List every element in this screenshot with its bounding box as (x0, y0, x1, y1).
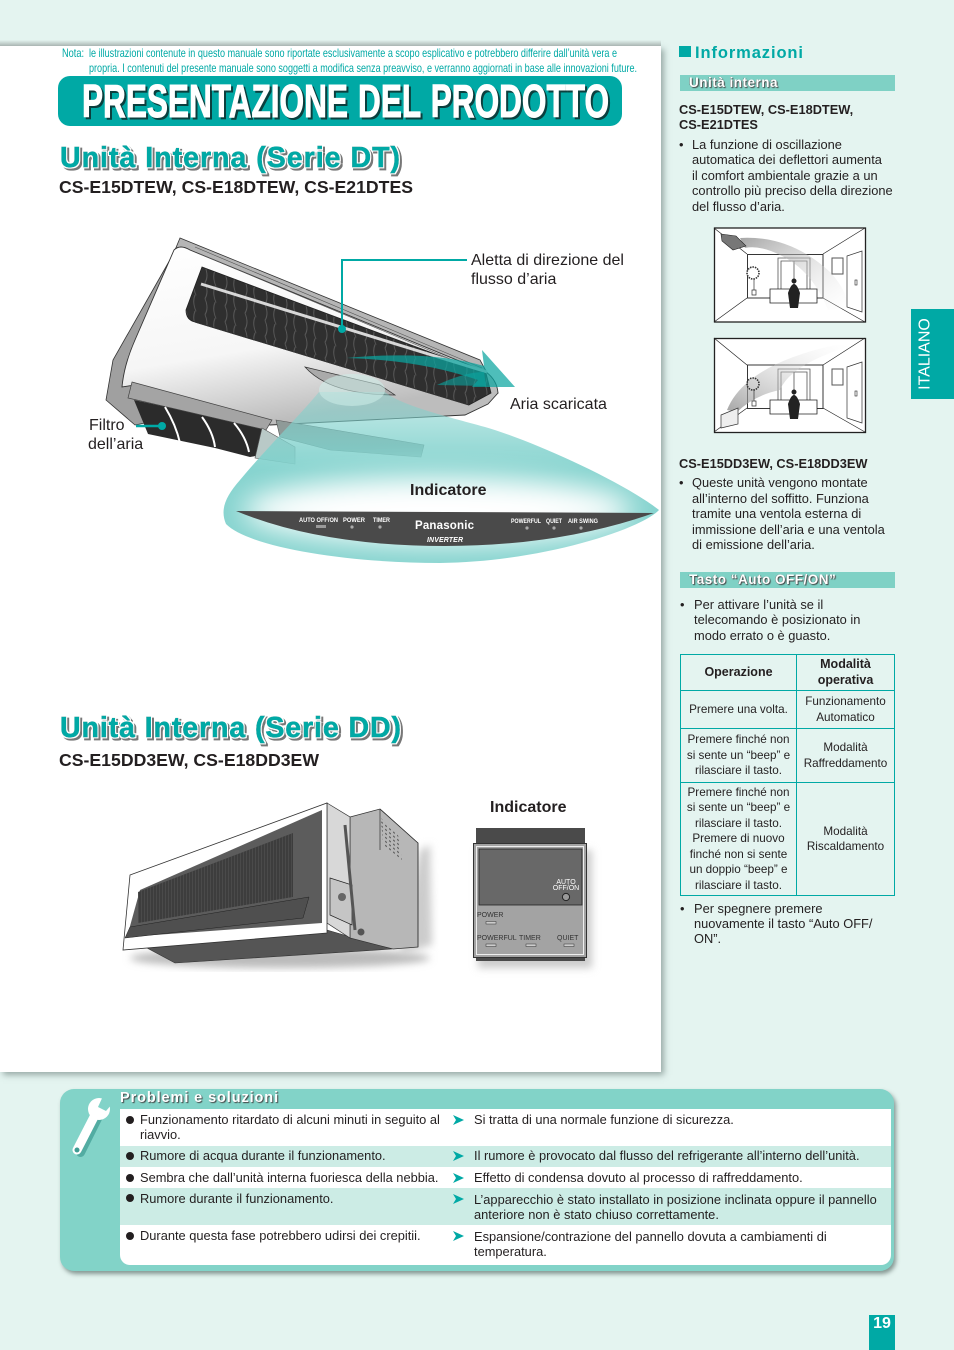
operation table: Premere una volta. (689, 703, 788, 716)
solutions column (453, 1112, 877, 1259)
controller bulge (305, 367, 395, 395)
text: DT info: CS-E15DTEW, CS-E18DTEW, (679, 102, 853, 117)
bar: unità interna (680, 75, 895, 91)
problems column: Rumore di acqua durante il funzionamento. (140, 1148, 386, 1163)
problems column: Rumore durante il funzionamento. (140, 1191, 333, 1206)
indicator strip: Panasonic (415, 520, 475, 532)
row 2 band (120, 1146, 891, 1167)
top shadow strip (0, 40, 661, 46)
text: tasto outro: • (680, 901, 684, 916)
room diagram 1 (714, 228, 866, 322)
discharge arrow (347, 350, 515, 387)
callout: aletta (338, 252, 624, 333)
text: tasto intro (680, 597, 860, 643)
vent (186, 267, 491, 405)
label: indicatore DD: Indicatore (490, 799, 567, 816)
problems column: Funzionamento ritardato di alcuni minuti in seguito al (140, 1112, 440, 1127)
panel title: Problemi e soluzioni (120, 1090, 279, 1106)
solutions column: temperatura. (474, 1244, 547, 1259)
operation table: Funzionamento Automatico (805, 695, 886, 724)
indicator panel DD: AUTO (556, 879, 576, 886)
indicator strip: AIR SWING (568, 518, 598, 525)
note text: Nota: (62, 46, 84, 60)
text: DD info: di emissione dell’aria. (692, 537, 815, 552)
indicator panel DD: POWERFUL (477, 935, 517, 942)
problems column: Sembra che dall’unità interna fuoriesca della nebbia. (140, 1170, 438, 1185)
indicator strip: POWERFUL (511, 518, 541, 525)
indicator strip: QUIET (546, 518, 562, 525)
indicator strip: POWER (343, 517, 365, 524)
problems column (126, 1112, 440, 1243)
white troubleshooting list (120, 1109, 891, 1265)
indicator strip: AUTO OFF/ON (299, 517, 338, 524)
bar: unità interna: Unità interna (689, 75, 778, 90)
text: DT info: controllo più preciso della direzione (692, 183, 893, 198)
solutions column: Il rumore è provocato dal flusso del refrigerante all’interno dell’unità. (474, 1148, 860, 1163)
page number: 19 (873, 1315, 891, 1332)
text: tasto intro: • (680, 597, 684, 612)
tab: italiano: ITALIANO (916, 318, 934, 390)
text: DD info: • (679, 475, 684, 490)
heading: serie DT: Unità Interna (Serie DT) (60, 142, 400, 174)
callout: filtro: dell’aria (88, 436, 143, 453)
callout: filtro (88, 417, 166, 453)
solutions column: Si tratta di una normale funzione di sicurezza. (474, 1112, 734, 1127)
operation table: Modalità operativa (818, 657, 873, 686)
heading: serie DD: Unità Interna (Serie DD) (60, 712, 401, 744)
operation table: Premere finché non si sente un “beep” e rilasciare il tasto. Premere di nuovo finché non si sente un doppio “beep” e rilasciare il tasto. (687, 786, 790, 892)
heading: informazioni: Informazioni (695, 44, 804, 62)
wall unit illustration (106, 238, 659, 563)
text: DT info: automatica dei deflettori aumenta (692, 152, 882, 167)
title banner: PRESENTAZIONE DEL PRODOTTO (82, 75, 609, 127)
note text: propria. I contenuti del presente manuale sono soggetti a modifica senza preavviso, e verranno aggiornati in base alle innovazioni future. (89, 61, 637, 75)
white body (122, 247, 498, 425)
text: DT info: il comfort ambientale grazie a un (692, 168, 878, 183)
solutions column: L’apparecchio è stato installato in posizione inclinata oppure il pannello (474, 1192, 877, 1207)
page number (869, 1315, 895, 1350)
text: DD info: immissione dell’aria e una ventola (692, 522, 885, 537)
problems column: Durante questa fase potrebbero udirsi dei crepitii. (140, 1228, 421, 1243)
indicator strip: INVERTER (427, 537, 463, 544)
text: tasto intro: Per attivare l’unità se il (694, 597, 823, 612)
problems column: riavvio. (140, 1127, 181, 1142)
indicator panel DD (474, 828, 592, 968)
title banner (58, 75, 622, 127)
indicator panel DD: POWER (477, 912, 503, 919)
operation table (680, 654, 895, 896)
indicator panel DD: OFF/ON (553, 885, 579, 892)
text: DD info (679, 456, 885, 552)
tab: italiano (911, 309, 954, 399)
text: DT info: CS-E21DTES (679, 117, 758, 132)
text: DT info (679, 102, 893, 214)
text: DT info: del flusso d’aria. (692, 199, 785, 214)
text: DT info: • (679, 137, 684, 152)
text: DT info: La funzione di oscillazione (692, 137, 842, 152)
text: tasto outro: nuovamente il tasto “Auto OFF/ (694, 916, 872, 931)
indicator beam (224, 392, 659, 563)
bar: tasto auto: Tasto “Auto OFF/ON” (689, 572, 836, 587)
model list DT: CS-E15DTEW, CS-E18DTEW, CS-E21DTES (59, 177, 413, 197)
note text: le illustrazioni contenute in questo manuale sono riportate esclusivamente a scopo esplicativo e potrebbero differire dall’unità vera e (89, 46, 617, 60)
indicator strip: TIMER (373, 517, 390, 524)
model list DD: CS-E15DD3EW, CS-E18DD3EW (59, 750, 320, 770)
duct unit illustration (123, 803, 432, 968)
panel: white main page (0, 46, 661, 1072)
indicator panel DD: TIMER (519, 935, 541, 942)
callout: aletta: flusso d’aria (471, 271, 556, 288)
solutions column: anteriore non è stato chiuso correttamente. (474, 1207, 719, 1222)
operation table: Modalità Raffreddamento (804, 741, 887, 770)
callout: aria scaricata: Aria scaricata (510, 396, 607, 413)
text: DD info: CS-E15DD3EW, CS-E18DD3EW (679, 456, 867, 471)
room diagram 2 (714, 338, 866, 432)
note text (62, 46, 637, 75)
text: tasto intro: telecomando è posizionato in (694, 612, 860, 627)
solutions column: Effetto di condensa dovuto al processo di raffreddamento. (474, 1170, 803, 1185)
grille and filter (134, 400, 278, 457)
text: tasto outro (680, 901, 872, 946)
callout: filtro: Filtro (89, 417, 125, 434)
text: DD info: all’interno del soffitto. Funziona (692, 491, 869, 506)
text: DD info: Queste unità vengono montate (692, 475, 868, 490)
operation table: Operazione (704, 665, 773, 679)
label: indicatore: Indicatore (410, 482, 487, 499)
indicator strip (236, 511, 654, 546)
row 4 band (120, 1188, 891, 1225)
text: tasto outro: ON”. (694, 931, 721, 946)
operation table: Modalità Riscaldamento (807, 825, 884, 853)
panel: problemi e soluzioni (60, 1089, 894, 1271)
text: DD info: tramite una ventola esterna di (692, 506, 861, 521)
gray back housing (170, 238, 498, 395)
text: tasto outro: Per spegnere premere (694, 901, 823, 916)
operation table: Premere finché non si sente un “beep” e rilasciare il tasto. (687, 733, 790, 777)
text: tasto intro: modo errato o è guasto. (694, 628, 830, 643)
indicator panel DD: QUIET (557, 935, 579, 942)
bar: tasto auto (680, 572, 895, 588)
lower panel (276, 420, 424, 457)
callout: aletta: Aletta di direzione del (471, 252, 624, 269)
icon: wrench (72, 1098, 110, 1157)
solutions column: Espansione/contrazione del pannello dovuta a cambiamenti di (474, 1229, 827, 1244)
